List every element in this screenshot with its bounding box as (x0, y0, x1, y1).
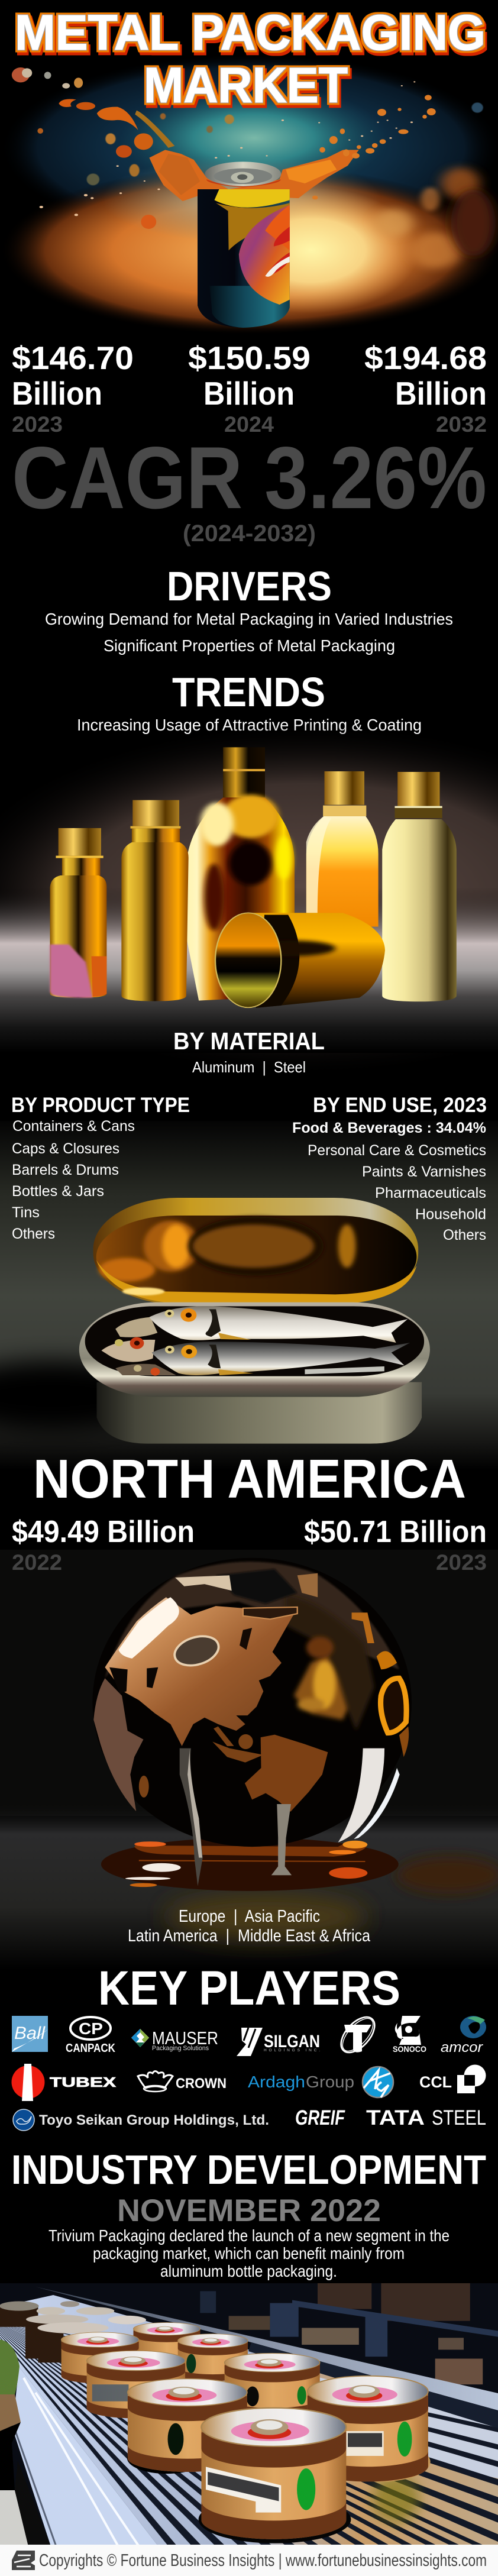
drivers section (45, 563, 453, 655)
logo: Silgan: SILGAN (264, 2032, 320, 2051)
logo: Ball: Ball (14, 2024, 46, 2043)
small islands (139, 1727, 263, 1798)
by product type list: Bottles & Jars (12, 1183, 104, 1200)
by product type list: Containers & Cans (12, 1118, 135, 1135)
far cans (0, 2301, 146, 2362)
drivers section: Significant Properties of Metal Packaging (104, 636, 395, 655)
tin drawn in photo coordinates (79, 1198, 430, 1444)
logo: Ardagh Group (248, 2067, 393, 2097)
title: MARKET (144, 57, 348, 113)
north america section: $50.71 Billion (304, 1515, 487, 1549)
logo: Tata Steel: TATA (366, 2106, 425, 2129)
logo: Tubex: TUBEX (50, 2074, 117, 2090)
drivers section: Growing Demand for Metal Packaging in Varied Industries (45, 610, 453, 628)
logo: Crown (138, 2071, 227, 2092)
logo: Ardagh Group: Group (306, 2073, 354, 2091)
hand at left edge (0, 2339, 51, 2546)
2024 value: $150.59 (188, 340, 311, 376)
by end use list: Paints & Varnishes (362, 1163, 486, 1180)
image: cans on conveyor (0, 2283, 498, 2546)
by product type list: BY PRODUCT TYPE (11, 1094, 190, 1117)
industry development section: aluminum bottle packaging. (160, 2262, 337, 2280)
image: tin of sardines (0, 1121, 498, 1470)
hero image: soda can with orange splash (0, 53, 498, 335)
icon: Fortune Business Insights mark (12, 2551, 35, 2570)
gold patch (294, 1637, 348, 1720)
market size figures (12, 340, 487, 437)
title (15, 5, 486, 113)
north america section (12, 1448, 487, 1575)
by material: Aluminum | Steel (192, 1058, 306, 1076)
north america section: 2023 (436, 1550, 487, 1575)
logo: Sonoco (393, 2016, 426, 2054)
globe drawn in photo coordinates (92, 1558, 412, 1891)
rear left can (127, 2379, 247, 2474)
by product type list: Others (12, 1226, 55, 1242)
logo: Tubex (12, 2064, 117, 2101)
by material (173, 1027, 325, 1076)
bottle four (306, 771, 379, 927)
logo: Trivium T (335, 2011, 381, 2058)
2023 value: 2023 (12, 412, 63, 437)
other regions (128, 1907, 371, 1945)
tin backdrop (0, 1121, 498, 1470)
right can (308, 2376, 431, 2482)
north america section: NORTH AMERICA (33, 1448, 466, 1510)
upper glass haze (105, 1562, 399, 1731)
cans on belt (0, 2301, 431, 2543)
logo: Tata Steel: STEEL (432, 2106, 486, 2129)
logo: Mauser: Packaging Solutions (152, 2045, 209, 2052)
sardines (101, 1306, 410, 1376)
trends section (77, 669, 422, 734)
image: golden metal bottles (0, 722, 498, 1077)
glass globe (92, 1558, 412, 1847)
Africa-like landmass (93, 1678, 143, 1811)
hero glow backdrop (0, 53, 498, 335)
north america section: 2022 (12, 1550, 62, 1575)
logo: Toyo Seikan: Toyo Seikan Group Holdings, Ltd. (39, 2112, 269, 2128)
mid right can (225, 2353, 320, 2417)
globe backdrop (0, 1550, 498, 1970)
other regions: Latin America | Middle East & Africa (128, 1927, 371, 1945)
green oval on far can (186, 2354, 196, 2373)
bottles backdrop (0, 722, 498, 1077)
2032 value: 2032 (436, 412, 487, 437)
lying can (215, 913, 385, 1008)
2032 value (364, 340, 487, 437)
Eurasia highlights (109, 1597, 297, 1693)
logo: Amcor (441, 2016, 486, 2055)
image: metallic globe (0, 1550, 498, 1970)
logo: CCL: CCL (419, 2073, 452, 2091)
belt ribs (0, 2315, 498, 2546)
South-America-like landmass (245, 1735, 328, 1812)
other regions: Europe | Asia Pacific (179, 1907, 320, 1926)
large bottle (186, 747, 295, 1001)
amber liquid base (101, 1838, 399, 1891)
logo: Silgan: HOLDINGS INC. (264, 2048, 320, 2053)
by material: BY MATERIAL (173, 1027, 325, 1055)
front can (199, 2408, 351, 2543)
soda can (198, 161, 290, 328)
title: METAL PACKAGING (15, 5, 486, 60)
logo: Tata Steel (366, 2106, 486, 2129)
by end use list: BY END USE, 2023 (313, 1094, 487, 1117)
logo: Canpack (66, 2017, 115, 2055)
factory backdrop (0, 2283, 498, 2546)
2024 value: Billion (203, 375, 295, 412)
north america section: $49.49 Billion (12, 1515, 195, 1549)
by end use list: Pharmaceuticals (375, 1185, 486, 1201)
logo: Silgan (237, 2028, 320, 2056)
drivers section: DRIVERS (167, 563, 332, 609)
open tin lid (93, 1198, 418, 1304)
2032 value: Billion (395, 375, 487, 412)
logo: Toyo Seikan (13, 2109, 269, 2131)
logo: CCL (419, 2064, 486, 2093)
footer bar (0, 2545, 498, 2576)
by end use list: Personal Care & Cosmetics (308, 1142, 486, 1159)
industry development section: NOVEMBER 2022 (117, 2193, 381, 2228)
2032 value: $194.68 (364, 340, 487, 376)
logo: Sonoco: SONOCO (393, 2044, 426, 2054)
logo: Greif: GREIF (295, 2106, 345, 2129)
CAGR figure: (2024-2032) (183, 521, 316, 547)
industry development section: packaging market, which can benefit mainly from (93, 2244, 405, 2263)
by end use list: Others (443, 1227, 486, 1243)
by product type list: Barrels & Drums (12, 1162, 119, 1178)
2024 value: 2024 (224, 412, 274, 437)
2023 value: Billion (12, 375, 102, 412)
conveyor belt (0, 2287, 498, 2546)
logo: Crown: CROWN (176, 2076, 227, 2092)
tin body (79, 1302, 430, 1444)
2023 value: $146.70 (12, 340, 134, 376)
logo: Amcor: amcor (441, 2040, 483, 2055)
by product type list (11, 1094, 190, 1242)
2023 value (12, 340, 134, 437)
trends section: TRENDS (172, 669, 325, 715)
bottle one (50, 828, 106, 998)
logo: Canpack: CP (79, 2019, 103, 2038)
key players heading: KEY PLAYERS (98, 1961, 400, 2015)
bottle two (121, 800, 189, 1001)
logo: Mauser: MAUSER (152, 2028, 218, 2048)
industry development section (11, 2147, 486, 2280)
by end use list: Household (415, 1206, 486, 1223)
glowing right rim (352, 1612, 409, 1757)
bottles drawn in photo coordinates (50, 747, 457, 1008)
by product type list: Tins (12, 1204, 40, 1221)
Eurasia continent (105, 1597, 297, 1746)
glass drips and highlight (180, 1748, 400, 1886)
bottle five (382, 772, 457, 1001)
logo: Ball (12, 2016, 48, 2052)
trends section: Increasing Usage of Attractive Printing & Coating (77, 716, 422, 734)
logo: Mauser (131, 2028, 218, 2052)
by end use list (292, 1094, 487, 1243)
logo: Ardagh Group: Ardagh (248, 2073, 305, 2091)
2024 value (188, 340, 311, 437)
by product type list: Caps & Closures (12, 1140, 119, 1157)
by end use list: Food & Beverages : 34.04% (292, 1120, 486, 1136)
logo: Canpack: CANPACK (66, 2042, 115, 2055)
mid left can (87, 2351, 185, 2418)
splash (12, 67, 483, 229)
company logos (12, 2011, 486, 2131)
